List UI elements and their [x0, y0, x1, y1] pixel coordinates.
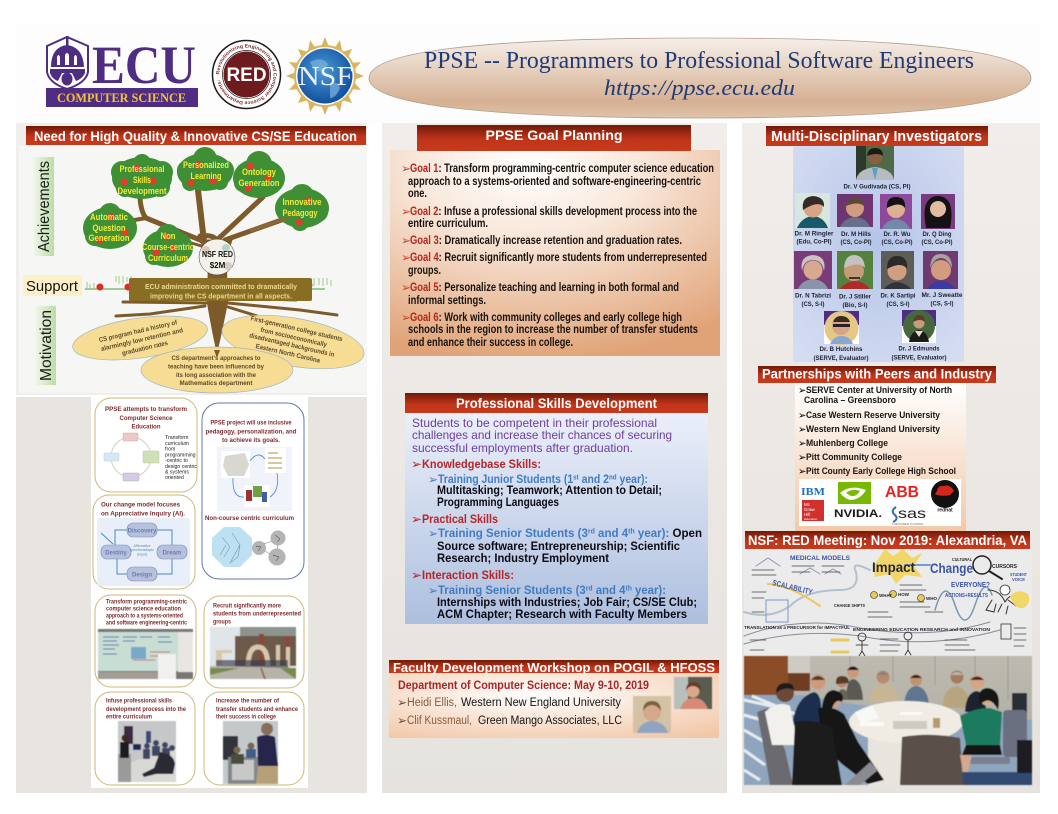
sketchnote graphic: CURSORS [992, 564, 1017, 570]
card: recruit students: groups [213, 618, 231, 626]
presenter: Heidi Ellis [397, 696, 621, 710]
ground line [85, 276, 331, 290]
AI cycle diagram: questions/topic [130, 548, 154, 552]
motivation: first-generation students: from socioeconomically [260, 327, 328, 349]
branch crown: non course-centric curriculum: Course-centric [142, 242, 194, 252]
skills intro: successful employments after graduation. [412, 441, 633, 455]
motivation: first-generation students: disadvantaged backgrounds in [249, 332, 335, 359]
sketchnote graphic: HOW [898, 592, 910, 597]
panel: project approach cards [16, 397, 367, 793]
photo: campus gathering [210, 627, 296, 679]
skills intro: Students to be competent in their professional [412, 416, 657, 430]
branch crown: personalized learning: Personalized [183, 160, 229, 170]
card: transform education: Computer Science [120, 415, 173, 422]
photo: Clif Kussmaul [633, 696, 671, 733]
carpet [744, 695, 1032, 785]
presenter: Clif Kussmaul: ➢ [397, 714, 407, 728]
partner list: ➢ [798, 438, 806, 450]
partner list: Pitt Community College [806, 451, 902, 462]
card: transfer students [204, 692, 304, 785]
branch crown: personalized learning [177, 147, 234, 191]
investigator: V Gudivada: Dr. V Gudivada (CS, PI) [844, 184, 910, 190]
branch crown: professional skills: Professional [120, 164, 164, 174]
branch crown: non course-centric curriculum [142, 224, 194, 267]
branch crown: innovative pedagogy: Innovative [282, 197, 322, 207]
door and wood panel [744, 656, 788, 695]
panel: goals and skills column [382, 123, 727, 793]
interaction skills: ➢ [428, 584, 438, 598]
photo: meeting group [744, 656, 1032, 785]
woman in black and coat on chair [818, 707, 884, 784]
section: NSF RED meeting [744, 531, 1032, 785]
photo: classroom [118, 721, 176, 782]
poster header band [16, 24, 1040, 123]
investigator: J Sweatte: (CS, S-I) [930, 300, 954, 308]
logo: Red Hat [931, 480, 959, 514]
cycle description: & systems [165, 470, 189, 476]
card: professional skills: Infuse professional skills [106, 698, 172, 704]
card: inclusive pedagogy: PPSE project will use inclusive [210, 420, 292, 426]
interaction skills [411, 568, 697, 621]
funding badge: NSF RED [202, 250, 233, 259]
card: transform education: PPSE attempts to transform [105, 406, 187, 413]
interaction skills: th [625, 586, 632, 592]
branch crown: professional skills: Skills [133, 175, 151, 185]
logo: ECU Computer Science: COMPUTER SCIENCE [57, 90, 186, 105]
investigator: N Tabrizi: (CS, S-I) [802, 301, 824, 308]
workshop date: Department of Computer Science: May 9-10, 2019 [398, 680, 649, 692]
section: professional skills development [405, 393, 708, 624]
goal 5: Goal 5: Personalize teaching and learning in both formal and [410, 280, 679, 294]
branch crown: innovative pedagogy [250, 184, 329, 231]
heading: faculty workshop: Faculty Development Workshop on POGIL & HFOSS [393, 660, 715, 675]
presenter: Heidi Ellis: Heidi Ellis, [407, 697, 457, 709]
knowledgebase skills: Multitasking; Teamwork; Attention to Detail; [437, 484, 662, 497]
table [849, 701, 963, 785]
practical skills: rd [588, 528, 595, 536]
logo: ABB: ABB [885, 484, 919, 501]
investigator: K Sartipi: (CS, S-I) [886, 301, 910, 308]
photo: advising session [223, 721, 278, 784]
branch crown: personalized learning: Learning [190, 171, 222, 181]
presenter: Heidi Ellis: Western New England University [461, 697, 621, 709]
branch crown: ontology generation [233, 151, 285, 198]
investigator: M Hills [837, 194, 873, 246]
investigator: Q Ding: Dr. Q Ding [922, 231, 952, 238]
practical skills: ➢ [428, 526, 438, 540]
logo: NSF: NSF [298, 61, 353, 91]
cycle description: -centric to [165, 458, 188, 464]
heading: NSF RED meeting: NSF: RED Meeting: Nov 2019: Alexandria, VA [748, 532, 1027, 548]
partner list [798, 384, 956, 478]
practical skills: th [628, 528, 635, 536]
logo: ECU Computer Science [46, 35, 198, 107]
sketchnote graphic: TRANSLATION as a PRECURSOR for IMPACTFUL [744, 625, 850, 631]
motivation: mathematics association: its long association with the [176, 372, 256, 379]
support banner [129, 278, 312, 301]
card: systems-oriented curriculum: and software engineering-centric [106, 620, 187, 626]
motivation: low retention: graduation rates [121, 340, 169, 357]
branch crown: automatic question generation: Automatic [90, 212, 128, 222]
sketchnote graphic: WHAT [879, 593, 892, 598]
section: faculty development workshop [389, 660, 719, 738]
goal 2: Goal 2: Infuse a professional skills development process into the [410, 204, 697, 218]
skills intro [412, 416, 672, 455]
chair back with jacket [900, 735, 963, 785]
woman in green [960, 708, 1002, 745]
partner list: Muhlenberg College [806, 437, 888, 448]
goal 3: ➢ [401, 234, 411, 248]
motivation: mathematics association: teaching have been influenced by [168, 364, 264, 370]
branch crown: innovative pedagogy: Pedagogy [282, 208, 318, 218]
cycle diagram [104, 433, 159, 481]
AI cycle diagram: Dream [163, 550, 181, 556]
cycle description [165, 435, 197, 481]
goal 6: Goal 6: Work with community colleges and early college high [410, 310, 682, 324]
funding badge [199, 239, 235, 275]
sketchnote graphic [744, 549, 1032, 656]
card: professional skills: entire curriculum [106, 714, 152, 720]
card: appreciative inquiry: on Appreciative Inquiry (AI). [101, 510, 185, 518]
knowledgebase skills: ➢ [428, 472, 438, 486]
investigator: J Stiller [837, 251, 873, 309]
heading: partnerships: Partnerships with Peers and Industry [762, 366, 992, 382]
logo: McGraw Hill: Mc [804, 502, 811, 507]
logo: McGraw Hill: Education [804, 517, 818, 521]
logo: McGraw Hill [802, 500, 824, 521]
knowledgebase skills: st [573, 474, 579, 482]
card: professional skills [95, 692, 195, 785]
knowledgebase skills: nd [609, 474, 617, 482]
AI cycle diagram: Destiny [105, 550, 127, 556]
card: inclusive pedagogy: to achieve its goals. [222, 437, 280, 444]
photo: whiteboard [98, 629, 193, 679]
logo: Red Hat: redhat [937, 508, 953, 514]
card: recruit students: Recruit significantly more [213, 602, 281, 610]
sketchnote graphic: CULTURAL [952, 557, 972, 562]
support banner: improving the CS department in all aspects. [150, 292, 292, 300]
practical skills: year): [635, 527, 673, 540]
AI cycle diagram: (input) [137, 552, 147, 556]
presenter: Clif Kussmaul: Clif Kussmaul, [407, 715, 472, 727]
investigator: M Hills: Dr. M Hills [841, 231, 871, 238]
skills intro: challenges and increase their chances of securing [412, 428, 672, 442]
investigator: M Ringler: Dr. M Ringler [794, 230, 834, 238]
logo: ECU Computer Science: ECU [92, 35, 196, 95]
interaction skills: Interaction Skills: [422, 568, 514, 582]
investigator: J Edmunds [892, 310, 946, 362]
goal 4: groups. [408, 263, 441, 277]
motivation: mathematics association: Mathematics department [180, 380, 253, 387]
goal 1: ➢ [401, 162, 411, 176]
card: inclusive pedagogy [202, 403, 304, 579]
knowledgebase skills: Programming Languages [437, 496, 559, 509]
presenter: Clif Kussmaul: Green Mango Associates, LLC [478, 715, 622, 727]
partner list: ➢ [798, 452, 806, 464]
investigator: N Tabrizi [794, 251, 832, 308]
partner list: ➢ [798, 466, 806, 478]
branch crown: automatic question generation: Question [92, 223, 126, 233]
card: transfer students: transfer students and enhance [216, 706, 298, 713]
goal 5 [401, 280, 679, 307]
section: partnerships [758, 366, 996, 531]
sketchnote graphic: STUDENT [1010, 572, 1027, 577]
cycle description: oriented [165, 475, 184, 481]
cycle description: programming [165, 452, 196, 458]
title pill [369, 38, 1031, 118]
sketchnote graphic: EVERYONE? [951, 580, 990, 589]
partner list: Pitt County Early College High School [806, 465, 956, 476]
knowledgebase skills: and 2 [579, 473, 609, 486]
heading: professional skills [405, 393, 708, 413]
investigator: J Edmunds: Dr. J Edmunds [898, 346, 940, 352]
logo: SAS: THE POWER TO KNOW. [892, 522, 924, 526]
motivation: first-generation students: First-generation college students [250, 315, 343, 343]
branch crown: automatic question generation: Generation [88, 233, 130, 243]
navy and white shirt attendees [792, 692, 821, 725]
interaction skills: rd [586, 586, 593, 592]
panel: need for education [16, 123, 368, 395]
card: transfer students: their success in college [216, 714, 276, 720]
investigator: K Sartipi [880, 251, 916, 308]
curriculum graph [212, 527, 286, 567]
logo: RED seal: RED [226, 65, 267, 86]
industry logos [799, 479, 961, 526]
logo: NSF [286, 37, 364, 115]
logo: NVIDIA [834, 482, 882, 520]
photo: Heidi Ellis [674, 677, 712, 709]
label: achievements: Achievements [36, 161, 53, 252]
partner list: SERVE Center at University of North [806, 384, 952, 395]
practical skills: Research; Industry Employment [437, 552, 609, 565]
investigator: V Gudivada [844, 146, 910, 190]
goal 1: one. [408, 186, 427, 200]
personalization diagram [217, 447, 292, 511]
card: appreciative inquiry [93, 495, 195, 589]
knowledgebase skills: Training Junior Students (1 [438, 473, 588, 486]
AI cycle diagram: Discovery [128, 528, 157, 534]
partner list: Carolina – Greensboro [804, 394, 896, 405]
project url: https://ppse.ecu.edu [604, 75, 795, 100]
branch crown: non course-centric curriculum: Curriculum [148, 253, 188, 263]
investigator: J Sweatte [922, 251, 963, 308]
presenter: Heidi Ellis: ➢ [397, 696, 407, 710]
investigator: N Tabrizi: Dr. N Tabrizi [795, 292, 831, 300]
card: recruit students: students from underrepresented [213, 610, 301, 618]
logo: SAS: sas [898, 505, 926, 521]
logo: RED seal: Revolutionizing Engineering and Computer Science Departments: [216, 44, 277, 105]
card: systems-oriented curriculum: computer science education [106, 606, 181, 612]
branch crown: ontology generation: Generation [238, 178, 280, 188]
chairs [757, 708, 793, 785]
card: appreciative inquiry: Our change model focuses [101, 502, 180, 508]
card: professional skills: development process into the [106, 706, 186, 713]
interaction skills: Internships with Industries; Job Fair; CS/SE Club; [437, 596, 697, 609]
goal 3: Goal 3: Dramatically increase retention and graduation rates. [410, 233, 682, 247]
goal 1 [401, 161, 714, 200]
goal 6: ➢ [401, 310, 411, 324]
sketchnote graphic: WHO [926, 596, 937, 601]
AI cycle diagram [97, 518, 190, 586]
goal 5: informal settings. [408, 293, 486, 307]
investigator: Q Ding: (CS, Co-PI) [922, 239, 952, 246]
goal 6: and enhance their success in college. [408, 335, 573, 349]
goal 5: ➢ [401, 280, 411, 294]
partner list: ➢ [798, 386, 806, 396]
goal 2: ➢ [401, 204, 411, 218]
motivation: first-generation students: Eastern North Carolina [255, 343, 321, 365]
investigator: K Sartipi: Dr. K Sartipi [880, 292, 916, 300]
logo: IBM: IBM [801, 487, 825, 498]
card: inclusive pedagogy: Non-course centric curriculum [205, 515, 294, 522]
goal 1: Goal 1: Transform programming-centric computer science education [410, 161, 714, 175]
motivation: first-generation students [218, 306, 368, 378]
card: systems-oriented curriculum [95, 595, 196, 687]
sketchnote graphic: SCALABILITY [772, 578, 814, 597]
sketchnote graphic: CHANGE SHIFTS [834, 603, 865, 608]
card: transform education: Education [132, 424, 160, 430]
goal 6: schools in the region to increase the number of transfer students [408, 322, 698, 336]
sketchnote graphic: Change [930, 560, 973, 576]
interaction skills: ACM Chapter; Research with Faculty Members [437, 608, 687, 621]
goal 4: Goal 4: Recruit significantly more students from underrepresented [410, 250, 707, 264]
branch crown: non course-centric curriculum: Non [160, 231, 176, 241]
practical skills: ➢ [411, 512, 422, 528]
card: recruit students [204, 596, 304, 688]
goal 6 [401, 310, 698, 349]
interaction skills: ➢ [411, 568, 422, 584]
heading: goal planning: PPSE Goal Planning [486, 127, 622, 143]
logo: SAS [892, 505, 926, 526]
tree illustration [70, 147, 368, 393]
support banner: ECU administration committed to dramatically [145, 282, 298, 291]
AI cycle diagram: Affirmative [134, 544, 150, 548]
presenter: Clif Kussmaul [397, 714, 622, 728]
cycle description: from [165, 446, 175, 452]
knowledgebase skills: ➢ [411, 458, 422, 472]
practical skills: and 4 [595, 527, 629, 540]
partner list: ➢ [798, 410, 806, 422]
goal 4: ➢ [401, 250, 411, 264]
cycle description: curriculum [165, 441, 189, 447]
sketchnote graphic: VOICE [1012, 577, 1025, 582]
motivation: low retention: alarmingly low retention and [100, 327, 184, 353]
investigator: M Ringler [794, 193, 834, 246]
section: goal planning [390, 125, 720, 356]
logo: McGraw Hill: Graw [804, 507, 816, 512]
investigator: J Edmunds: (SERVE, Evaluator) [892, 354, 946, 362]
label: support: Support [26, 278, 79, 295]
investigator: B Hutchins: Dr. B Hutchins [820, 346, 863, 353]
motivation: mathematics association: CS department's approaches to [172, 355, 260, 362]
investigator: J Sweatte: Mr. J Sweatte [922, 292, 963, 299]
knowledgebase skills [411, 457, 662, 509]
motivation: mathematics association [141, 347, 293, 393]
investigator: B Hutchins: (SERVE, Evaluator) [814, 355, 868, 362]
section: investigators [766, 126, 988, 362]
investigator: J Stiller: Dr. J Stiller [839, 294, 871, 300]
branch crown: professional skills [111, 154, 173, 199]
heading: investigators: Multi-Disciplinary Investigators [771, 129, 982, 145]
sketchnote graphic: MEDICAL MODELS [790, 556, 850, 562]
goal 1: approach to a systems-oriented and software-engineering-centric [408, 174, 701, 188]
sketchnote graphic: ACTIONS+RESULTS [945, 593, 988, 599]
heading: professional skills: Professional Skills Development [456, 396, 657, 411]
motivation: low retention [70, 309, 210, 367]
cycle description: Transform [165, 435, 188, 441]
trunk and roots [116, 190, 337, 352]
interaction skills: and 4 [593, 584, 626, 597]
funding badge: $2M [210, 261, 226, 270]
cycle description: design centric [165, 464, 197, 470]
panel: people and partners column [742, 123, 1040, 793]
investigator: R Wu [880, 194, 912, 246]
card: transform education [95, 398, 197, 492]
practical skills: Open [673, 527, 702, 540]
AI cycle diagram: Design [132, 572, 152, 578]
logo: NVIDIA: NVIDIA. [834, 508, 882, 520]
branch crown: ontology generation: Ontology [242, 167, 276, 177]
goal 2 [401, 204, 697, 230]
practical skills [411, 512, 702, 565]
partner list: Western New England University [806, 423, 941, 434]
partner list: Case Western Reserve University [806, 409, 941, 420]
branch crown: professional skills: Development [118, 186, 167, 196]
practical skills: Practical Skills [422, 512, 498, 526]
card: transfer students: Increase the number of [216, 698, 280, 704]
investigator: M Hills: (CS, Co-PI) [840, 239, 872, 246]
background people [836, 666, 1027, 713]
title: PPSE -- Programmers to Professional Software Engineers [424, 48, 974, 74]
interaction skills: year): [632, 584, 666, 597]
card: inclusive pedagogy: pedagogy, personalization, and [206, 428, 296, 436]
investigator: J Stiller: (Bio, S-I) [842, 302, 868, 309]
investigator: R Wu: (CS, Co-PI) [882, 239, 912, 246]
heading: need for education: Need for High Quality & Innovative CS/SE Education [34, 128, 357, 144]
sketchnote graphic: ENGINEERING EDUCATION RESEARCH and INNOVATION [853, 627, 991, 633]
sketchnote graphic: Impact [872, 559, 915, 575]
label: motivation: Motivation [38, 310, 55, 381]
logo: McGraw Hill: Hill [804, 512, 810, 517]
investigator: R Wu: Dr. R. Wu [884, 231, 911, 238]
investigator: M Ringler: (Edu, Co-PI) [796, 238, 832, 246]
goal 2: entire curriculum. [408, 216, 488, 230]
motivation: low retention: CS program had a history of [98, 319, 179, 344]
investigator: B Hutchins [814, 311, 868, 362]
card: systems-oriented curriculum: approach to a systems-oriented [106, 612, 183, 620]
practical skills: Training Senior Students (3 [438, 527, 589, 540]
heading: goal planning [417, 125, 691, 151]
practical skills: Source software; Entrepreneurship; Scientific [437, 540, 681, 553]
knowledgebase skills: year): [617, 473, 648, 486]
branch crown: automatic question generation [83, 203, 137, 249]
goals body [390, 150, 720, 356]
knowledgebase skills: Knowledgebase Skills: [422, 457, 541, 471]
investigator: Q Ding [921, 194, 955, 246]
partner list: ➢ [798, 424, 806, 436]
goal 4 [401, 250, 707, 277]
card: systems-oriented curriculum: Transform programming-centric [106, 598, 187, 606]
interaction skills: Training Senior Students (3 [438, 584, 589, 597]
